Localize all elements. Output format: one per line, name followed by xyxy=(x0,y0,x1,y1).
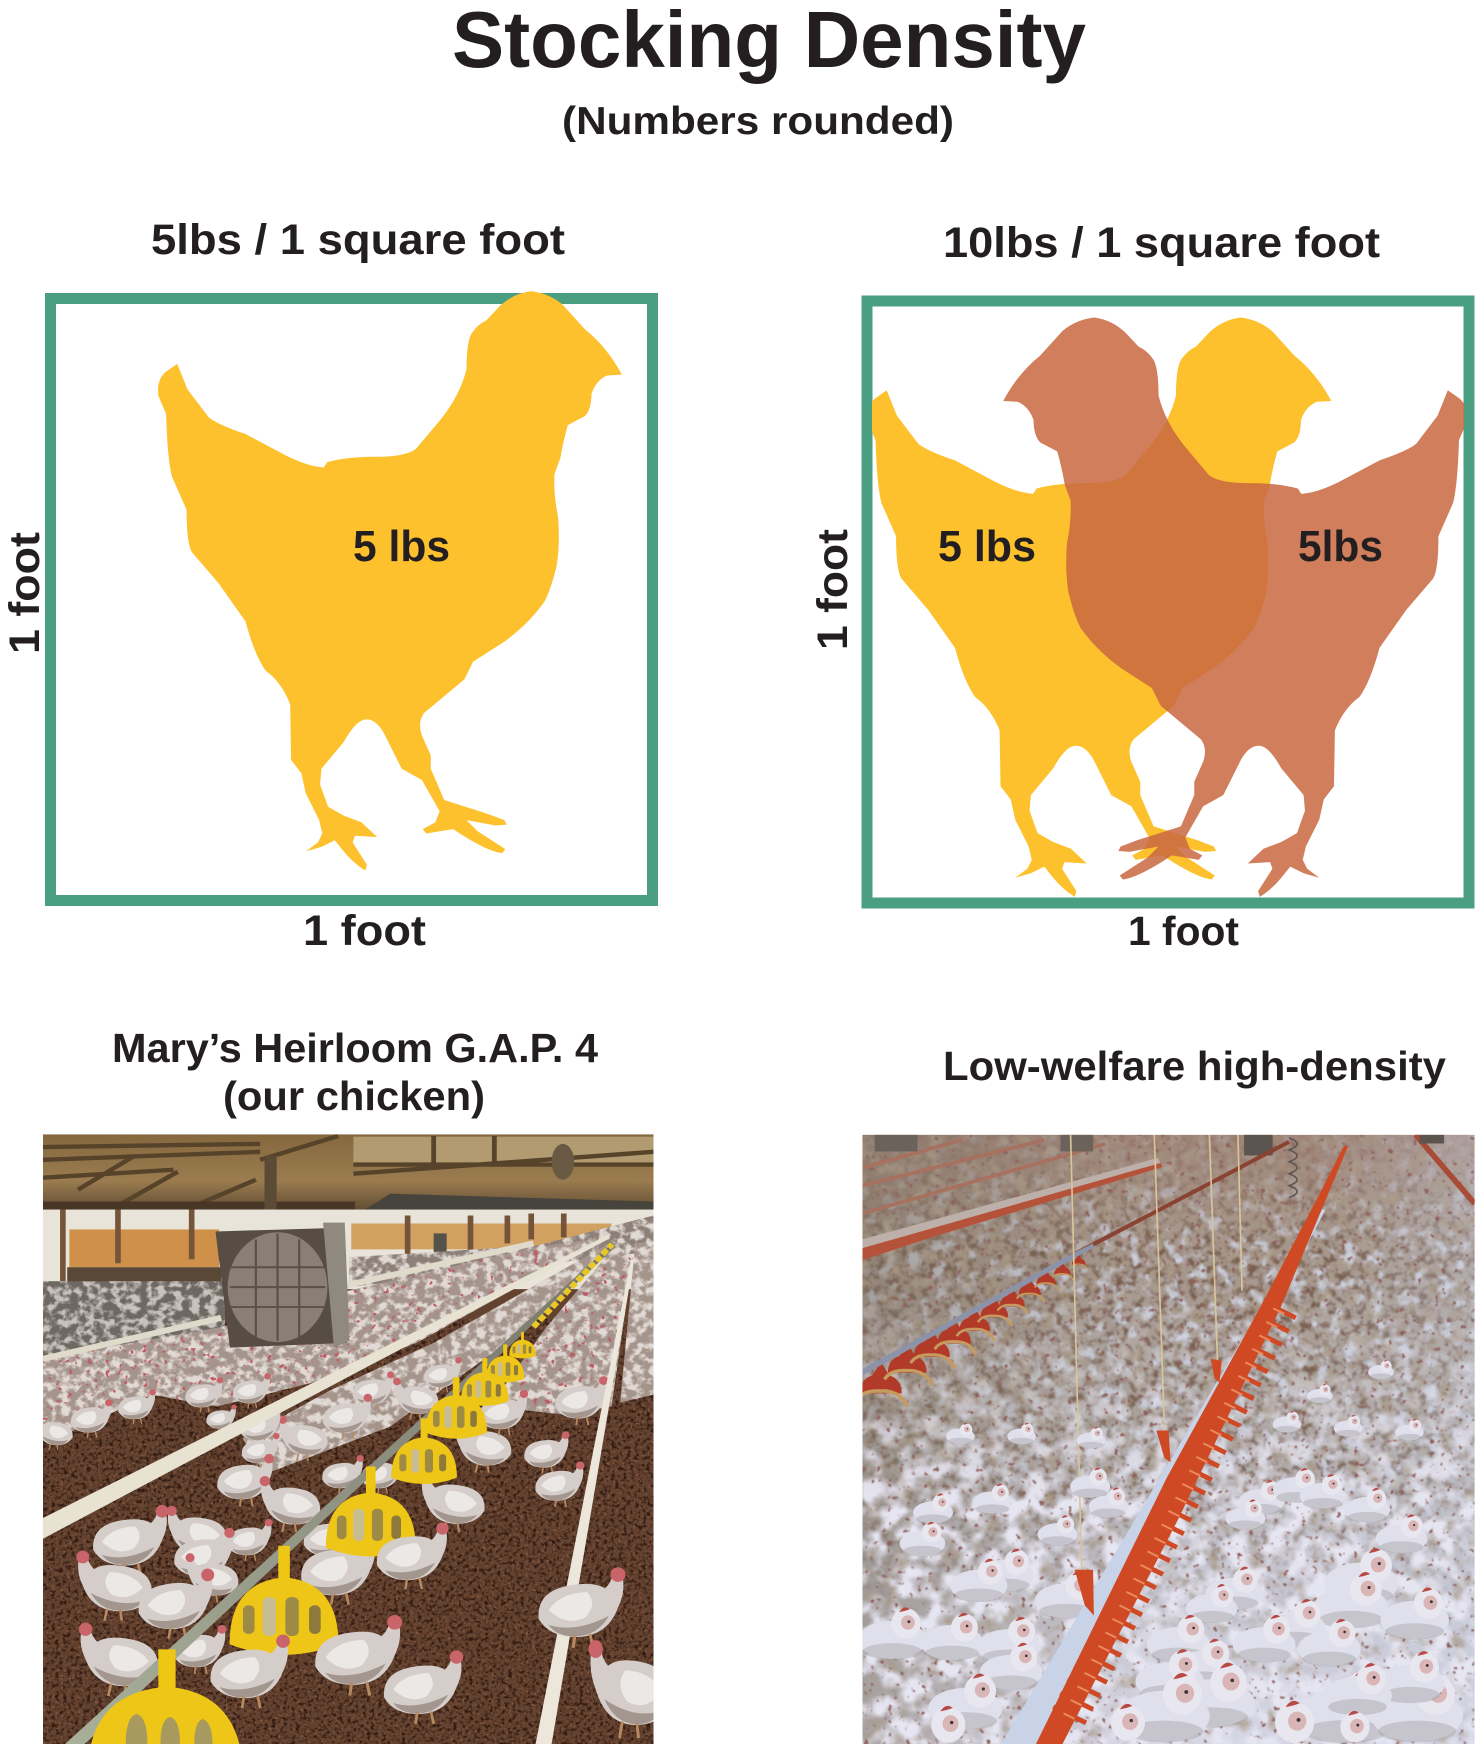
foreground birds xyxy=(210,1523,672,1738)
square frame: right xyxy=(867,301,1469,903)
hanging strings xyxy=(1071,1135,1242,1570)
axis label: bottom 1 foot: 1 foot xyxy=(303,907,426,955)
axis label: left side 1 foot: 1 foot xyxy=(1,532,49,654)
axis label: left side 1 foot: 1 foot xyxy=(809,529,857,650)
ventilation fan xyxy=(216,1223,350,1348)
red clips on strings xyxy=(1075,1359,1222,1616)
right white rail xyxy=(536,1259,634,1744)
weight label: yellow bird: 5 lbs xyxy=(938,522,1036,571)
birds on the floor xyxy=(35,1357,608,1696)
chicken silhouette: yellow bird xyxy=(867,317,1331,897)
heading: Mary's Heirloom xyxy=(112,1025,598,1119)
top rows of feeder rails xyxy=(862,1135,1475,1260)
individual birds xyxy=(858,1360,1463,1743)
main red feeder teeth xyxy=(1036,1146,1348,1744)
weight label: 5 lbs: 5 lbs xyxy=(353,522,450,571)
heading: low-welfare: Low-welfare high-density xyxy=(943,1043,1446,1089)
main white rail xyxy=(43,1235,609,1539)
axis label: bottom 1 foot: 1 foot xyxy=(1128,908,1239,954)
floor of birds xyxy=(862,1135,1475,1744)
chicken silhouette: orange bird mirrored xyxy=(1003,317,1467,897)
feeder pipe xyxy=(65,1243,616,1744)
distant feeders xyxy=(533,1244,612,1327)
square frame: left xyxy=(50,298,652,900)
far and side rails xyxy=(43,1243,533,1359)
mid-distance flock xyxy=(43,1237,654,1474)
second red feeder line xyxy=(856,1142,1289,1407)
nearest feeder, cropped by photo edge xyxy=(91,1649,239,1744)
chicken silhouette: one bird xyxy=(158,291,622,871)
heading: left density: 5lbs / 1 square foot xyxy=(151,216,565,264)
overlapping chickens xyxy=(867,317,1467,897)
barn floor xyxy=(43,1134,654,1744)
subtitle: (Numbers rounded) xyxy=(562,100,954,143)
windows and curtains xyxy=(43,1210,654,1289)
ceiling xyxy=(42,1134,654,1210)
photo: Mary's Heirloom barn xyxy=(35,1134,672,1744)
panel: 10 lbs per square foot xyxy=(809,219,1469,954)
far flock xyxy=(43,1216,654,1365)
main white feed strip xyxy=(1001,1210,1326,1744)
photo: low-welfare high-density barn xyxy=(856,1135,1475,1744)
heading: right density: 10lbs / 1 square foot xyxy=(943,219,1380,267)
yellow feeders xyxy=(91,1332,536,1744)
panel: 5 lbs per square foot xyxy=(1,216,652,955)
heading: Mary's Heirloom: (our chicken) xyxy=(223,1073,485,1119)
heading: Mary's Heirloom: Mary’s Heirloom G.A.P. 4 xyxy=(112,1025,598,1071)
weight label: orange bird: 5lbs xyxy=(1298,522,1383,571)
